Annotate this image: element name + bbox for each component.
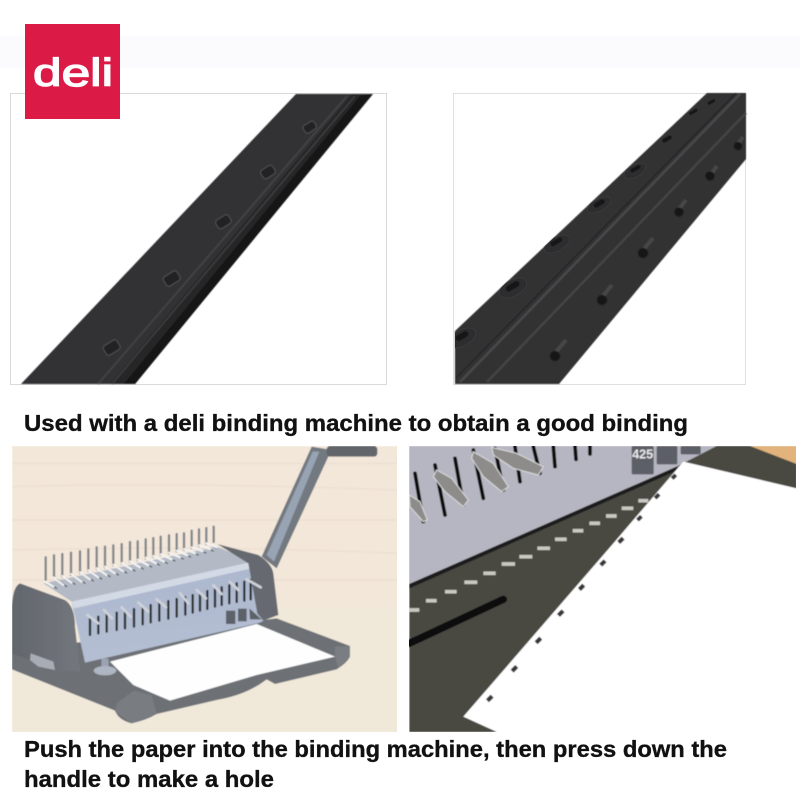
caption: push the paper — [24, 736, 727, 792]
slots — [90, 580, 251, 635]
strip body — [21, 94, 373, 384]
logo: deli — [25, 24, 120, 119]
machine front plate — [409, 446, 717, 584]
caption: push the paper: Push the paper into the binding machine, then press down the — [24, 736, 727, 762]
handle — [262, 447, 328, 568]
front plate — [72, 568, 264, 664]
guide dashes — [409, 501, 648, 610]
right cap — [217, 544, 278, 621]
control icons — [226, 608, 262, 624]
tray — [409, 446, 797, 732]
punch slots — [415, 446, 590, 522]
machine base — [12, 618, 350, 723]
photo: binding machine on table — [12, 446, 400, 732]
photo: paper inserted in machine — [409, 446, 797, 733]
strip slots — [445, 99, 716, 352]
knob and latch — [100, 658, 110, 666]
strip pins — [550, 137, 743, 361]
model badges: 425 — [632, 447, 653, 461]
comb teeth — [46, 527, 214, 580]
left cap — [12, 583, 78, 656]
paper — [110, 624, 335, 701]
punched holes — [486, 473, 677, 702]
panel: binding strip, front view — [10, 94, 386, 384]
strip bumps — [102, 120, 318, 356]
caption: binding quality: Used with a deli binding machine to obtain a good binding — [24, 410, 688, 436]
model badges — [632, 446, 701, 474]
tray slot — [409, 599, 503, 643]
panel: binding strip, inner view — [445, 93, 746, 384]
top plate — [43, 547, 253, 602]
strip body — [455, 93, 746, 384]
logo: deli: deli — [33, 52, 113, 95]
desk corner — [750, 446, 797, 464]
wall and table — [12, 446, 400, 611]
white paper — [463, 462, 797, 733]
caption: push the paper: handle to make a hole — [24, 766, 274, 792]
